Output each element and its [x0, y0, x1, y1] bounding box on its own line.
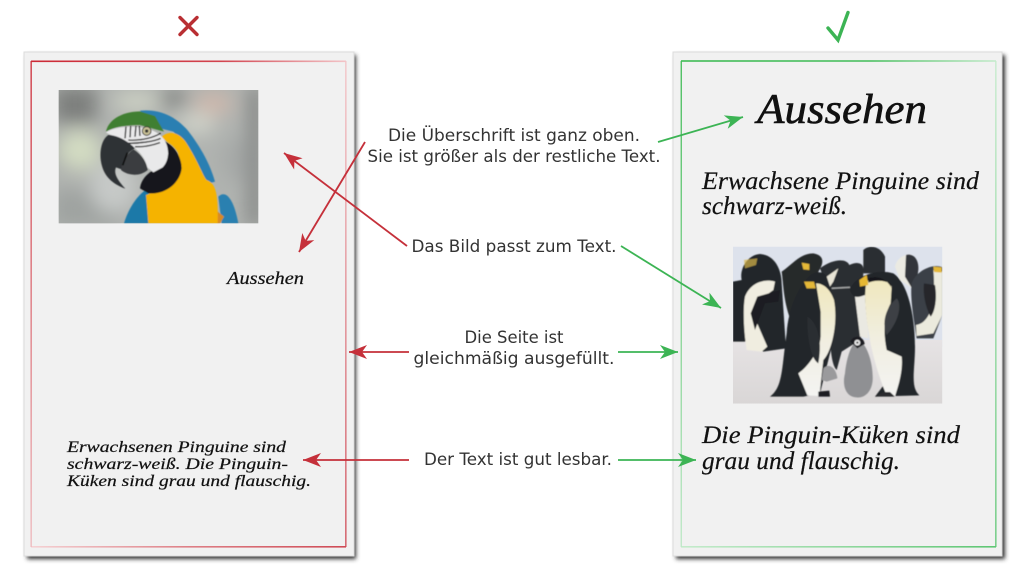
back middle penguins: [780, 252, 824, 316]
icon: red cross: [180, 18, 197, 34]
label: page filled: gleichmäßig ausgefüllt.: [414, 348, 614, 368]
label: picture fits: Das Bild passt zum Text.: [412, 236, 616, 256]
image: penguins: [733, 247, 942, 404]
arrow: text right: [618, 459, 696, 461]
baby penguin small: [822, 366, 837, 382]
arrow: heading to bad heading: [299, 142, 365, 252]
body text bottom: [701, 422, 961, 475]
body text bottom: grau und flauschig.: [702, 448, 900, 475]
panel: good page example: [673, 52, 1005, 559]
front left penguin: [770, 272, 835, 397]
arrow: page fill left: [349, 351, 409, 353]
icon: green check mark: [828, 12, 848, 40]
body text top: schwarz-weiß.: [702, 193, 847, 220]
label: page filled: [414, 327, 614, 368]
small body text: schwarz-weiß. Die Pinguin-: [67, 456, 288, 473]
back right penguin: [911, 266, 942, 338]
back left penguin: [733, 254, 786, 352]
panel: bad page example: [24, 52, 356, 559]
body text bottom: Die Pinguin-Küken sind: [701, 422, 961, 449]
bending white penguin: [744, 281, 775, 352]
small body text: Küken sind grau und flauschig.: [66, 473, 311, 490]
arrow: picture to parrot: [284, 153, 407, 246]
arrow: text left: [303, 459, 409, 461]
label: heading position: Die Überschrift ist ganz oben.: [388, 124, 640, 145]
front right penguin: [850, 272, 919, 397]
small misplaced heading: Aussehen: [226, 268, 304, 288]
image: parrot: [53, 87, 262, 227]
body text top: [701, 168, 980, 220]
chick: [844, 340, 873, 397]
label: text legible: Der Text ist gut lesbar.: [424, 449, 612, 469]
small body text: Erwachsenen Pinguine sind: [66, 439, 286, 456]
arrow: heading to good heading: [658, 117, 743, 142]
label: heading position: [368, 124, 660, 166]
label: page filled: Die Seite ist: [464, 327, 564, 347]
body text top: Erwachsene Pinguine sind: [701, 168, 980, 195]
arrow: picture to penguins: [621, 246, 721, 308]
arrow: page fill right: [618, 351, 678, 353]
small body text: [66, 439, 311, 490]
label: heading position: Sie ist größer als der restliche Text.: [368, 146, 660, 166]
large heading: Aussehen: [754, 87, 927, 133]
